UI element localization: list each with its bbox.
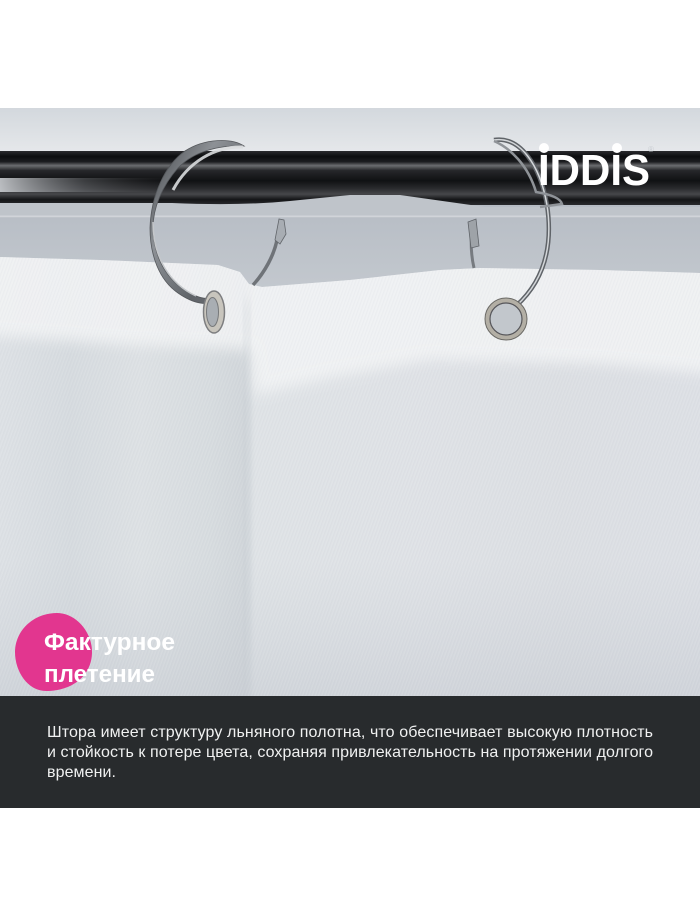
left grommet: [204, 291, 224, 333]
wall below rod: [0, 205, 700, 287]
wall above rod: [0, 108, 700, 154]
right curtain ring: [468, 140, 562, 340]
accent blob: pink circle: [15, 613, 92, 691]
photo: curtain on a chrome rod: [0, 108, 700, 696]
fold shadow: [243, 300, 251, 696]
chrome rod: [0, 151, 700, 218]
panel: description band: [0, 696, 700, 808]
curtain fabric: [0, 240, 700, 696]
infographic canvas: [0, 108, 700, 808]
text block: description: Штора имеет структуру льняного полотна, что обеспечивает высокую плотность: [47, 724, 653, 741]
logo: IDDIS: IDDIS: [538, 147, 650, 195]
logo: IDDIS: ®: [648, 145, 654, 154]
right grommet: [488, 300, 524, 338]
text block: description: [47, 724, 653, 781]
text block: description: и стойкость к потере цвета, сохраняя привлекательность на протяжении долгого: [47, 744, 653, 761]
heading: Фактурное плетение: Фактурное: [44, 629, 175, 656]
heading: Фактурное плетение: плетение: [44, 661, 155, 688]
heading: Фактурное плетение: [44, 629, 175, 688]
left curtain ring: [150, 141, 286, 333]
text block: description: времени.: [47, 764, 116, 781]
